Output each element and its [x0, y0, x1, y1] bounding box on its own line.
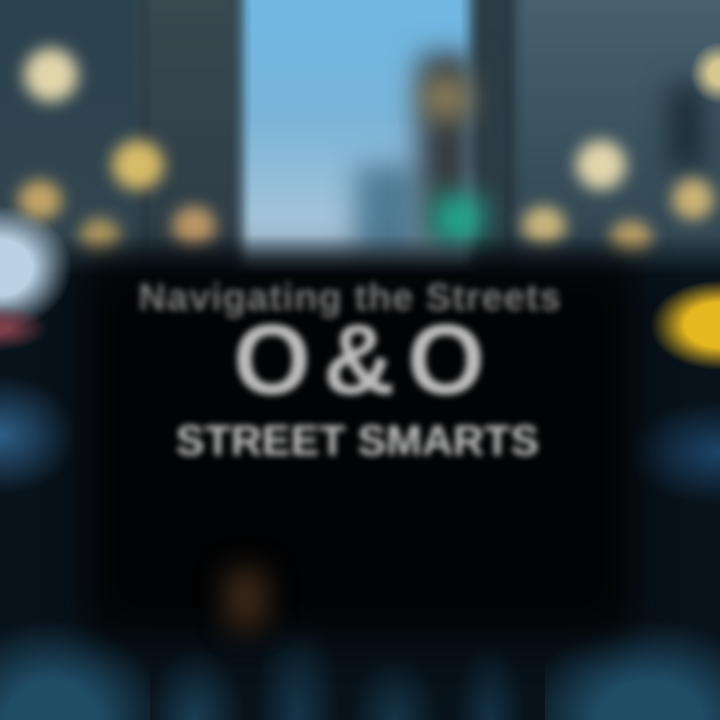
light 8: [672, 178, 714, 220]
heading: lower line: STREET SMARTS: [176, 417, 539, 465]
left person: red cap: [0, 305, 48, 351]
crowd: bottom centre right: [350, 655, 440, 720]
lower dark street band: [0, 235, 720, 720]
right person: yellow hat: [650, 280, 720, 370]
crowd: bottom left: [0, 600, 150, 720]
light 6: [576, 140, 626, 190]
right buildings: [506, 0, 720, 270]
sky: [230, 0, 482, 270]
crowd: brown accent over card: [226, 570, 266, 625]
light 9: [610, 220, 652, 256]
green signal: [434, 196, 482, 244]
light 10: [690, 42, 720, 104]
traffic tower: [420, 55, 474, 245]
crowd: bottom right: [545, 600, 720, 720]
light 1: [24, 48, 78, 102]
light 3: [18, 180, 62, 220]
right person: body: [625, 400, 720, 505]
heading: small top line: Navigating the Streets: [138, 277, 562, 319]
light 4: [80, 218, 120, 254]
panel: black title card: [85, 262, 635, 637]
left tower: [140, 0, 250, 263]
left person: white sign: [0, 205, 72, 330]
dark window column: [670, 85, 702, 170]
heading: large O&O: O&O: [233, 304, 497, 416]
distant building: [356, 165, 418, 255]
amber signal: [424, 78, 468, 118]
light 2: [112, 140, 164, 190]
crowd: bottom far right: [455, 640, 525, 720]
left buildings: [0, 0, 147, 270]
light 5: [172, 206, 216, 248]
crowd: brown accent: [228, 575, 264, 625]
street lights: [8, 36, 720, 261]
right tower edge: [462, 0, 521, 263]
left person: body: [0, 375, 78, 495]
crowd: bottom centre left: [145, 645, 245, 720]
light 7: [522, 206, 566, 246]
crowd: bottom centre: [255, 600, 340, 720]
